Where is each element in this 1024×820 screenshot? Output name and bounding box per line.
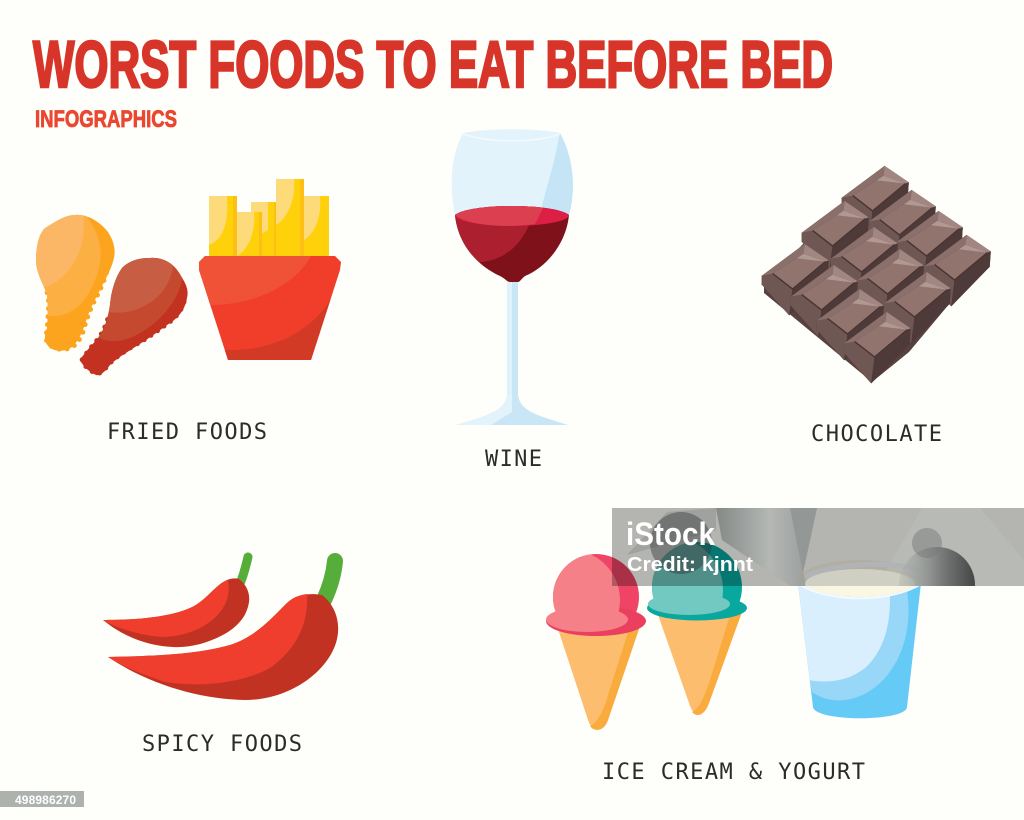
- icon: chocolate bar: [762, 166, 991, 383]
- label: spicy foods: SPICY FOODS: [142, 732, 302, 757]
- icon: wine glass: [450, 129, 580, 425]
- icon: ice cream cone teal: [647, 542, 747, 715]
- icon: yogurt cup: [790, 560, 921, 718]
- image id tag: [0, 791, 84, 807]
- icon: chili peppers: [103, 557, 338, 700]
- label: wine: WINE: [485, 447, 542, 472]
- label: fried foods: FRIED FOODS: [107, 420, 267, 445]
- label: chocolate: CHOCOLATE: [811, 422, 942, 447]
- watermark text: [626, 516, 753, 576]
- watermark text: iStock: [626, 516, 715, 552]
- label: ice cream and yogurt: ICE CREAM & YOGURT: [602, 760, 865, 785]
- icon: fried chicken orange: [30, 213, 115, 351]
- image id tag: 498986270: [15, 793, 76, 807]
- subtitle: INFOGRAPHICS: [35, 106, 177, 133]
- watermark band: [612, 508, 1024, 586]
- icon: french fries: [199, 179, 341, 360]
- icon: fried chicken red: [80, 250, 188, 375]
- watermark text: Credit: kjnnt: [627, 554, 753, 576]
- icon: ice cream cone pink: [546, 554, 646, 730]
